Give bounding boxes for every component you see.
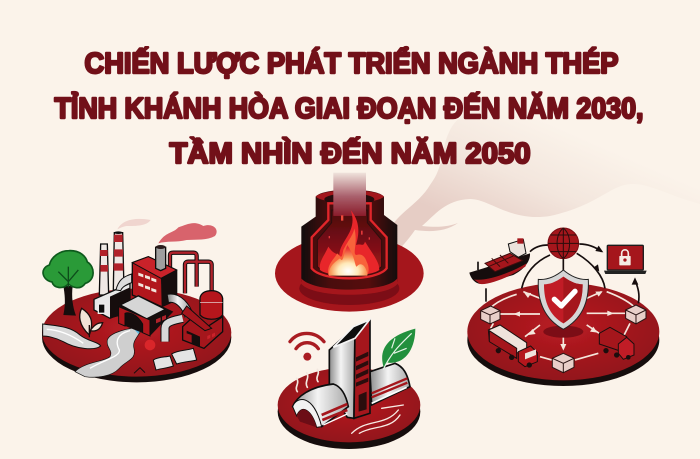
right building xyxy=(183,317,223,348)
swoosh xyxy=(352,405,403,433)
boxes xyxy=(481,305,646,373)
illustration: steel mill rolls, wifi and leaf xyxy=(278,320,420,449)
lower hall xyxy=(119,295,173,336)
disc xyxy=(278,374,420,449)
flame xyxy=(320,210,379,275)
front tube xyxy=(293,384,348,427)
furnace body xyxy=(301,190,397,293)
leaf xyxy=(80,308,103,335)
leaf xyxy=(382,329,415,369)
black arcs xyxy=(486,244,639,303)
shield xyxy=(538,270,588,329)
river xyxy=(43,324,101,349)
truck right xyxy=(599,327,634,360)
title line 2: TỈNH KHÁNH HÒA GIAI ĐOẠN ĐẾN NĂM 2030, xyxy=(54,91,644,125)
beam xyxy=(333,173,366,216)
tree xyxy=(43,251,93,316)
title xyxy=(54,46,644,170)
disc xyxy=(467,294,659,386)
main tower xyxy=(132,257,177,307)
illustration: furnace with flame xyxy=(275,173,424,312)
pipes background xyxy=(170,253,212,293)
chimneys xyxy=(99,244,109,295)
network connections xyxy=(490,292,633,360)
red spot xyxy=(145,340,155,350)
inner chamber xyxy=(312,203,387,278)
shield shadow xyxy=(543,326,583,338)
base disc xyxy=(275,235,424,312)
smoke plume background xyxy=(388,100,700,254)
left building xyxy=(94,283,130,318)
tank xyxy=(200,291,223,319)
wifi xyxy=(290,333,324,349)
heat waves xyxy=(296,369,318,392)
silver pipes xyxy=(168,298,189,317)
illustration: logistics network and shield xyxy=(467,228,659,386)
title line 3: TẦM NHÌN ĐẾN NĂM 2050 xyxy=(170,136,530,170)
illustration: steel plant on red disc xyxy=(42,219,231,382)
title line 1: CHIẾN LƯỢC PHÁT TRIỂN NGÀNH THÉP xyxy=(84,46,618,80)
smoke xyxy=(117,219,151,229)
laptop xyxy=(604,245,647,274)
disc xyxy=(42,292,231,382)
ship xyxy=(469,238,530,284)
bags xyxy=(153,348,197,370)
tower xyxy=(329,327,355,418)
stack xyxy=(156,247,166,271)
globe xyxy=(548,228,579,259)
sparks xyxy=(341,215,343,221)
truck left xyxy=(488,325,537,368)
right tube xyxy=(370,363,410,405)
